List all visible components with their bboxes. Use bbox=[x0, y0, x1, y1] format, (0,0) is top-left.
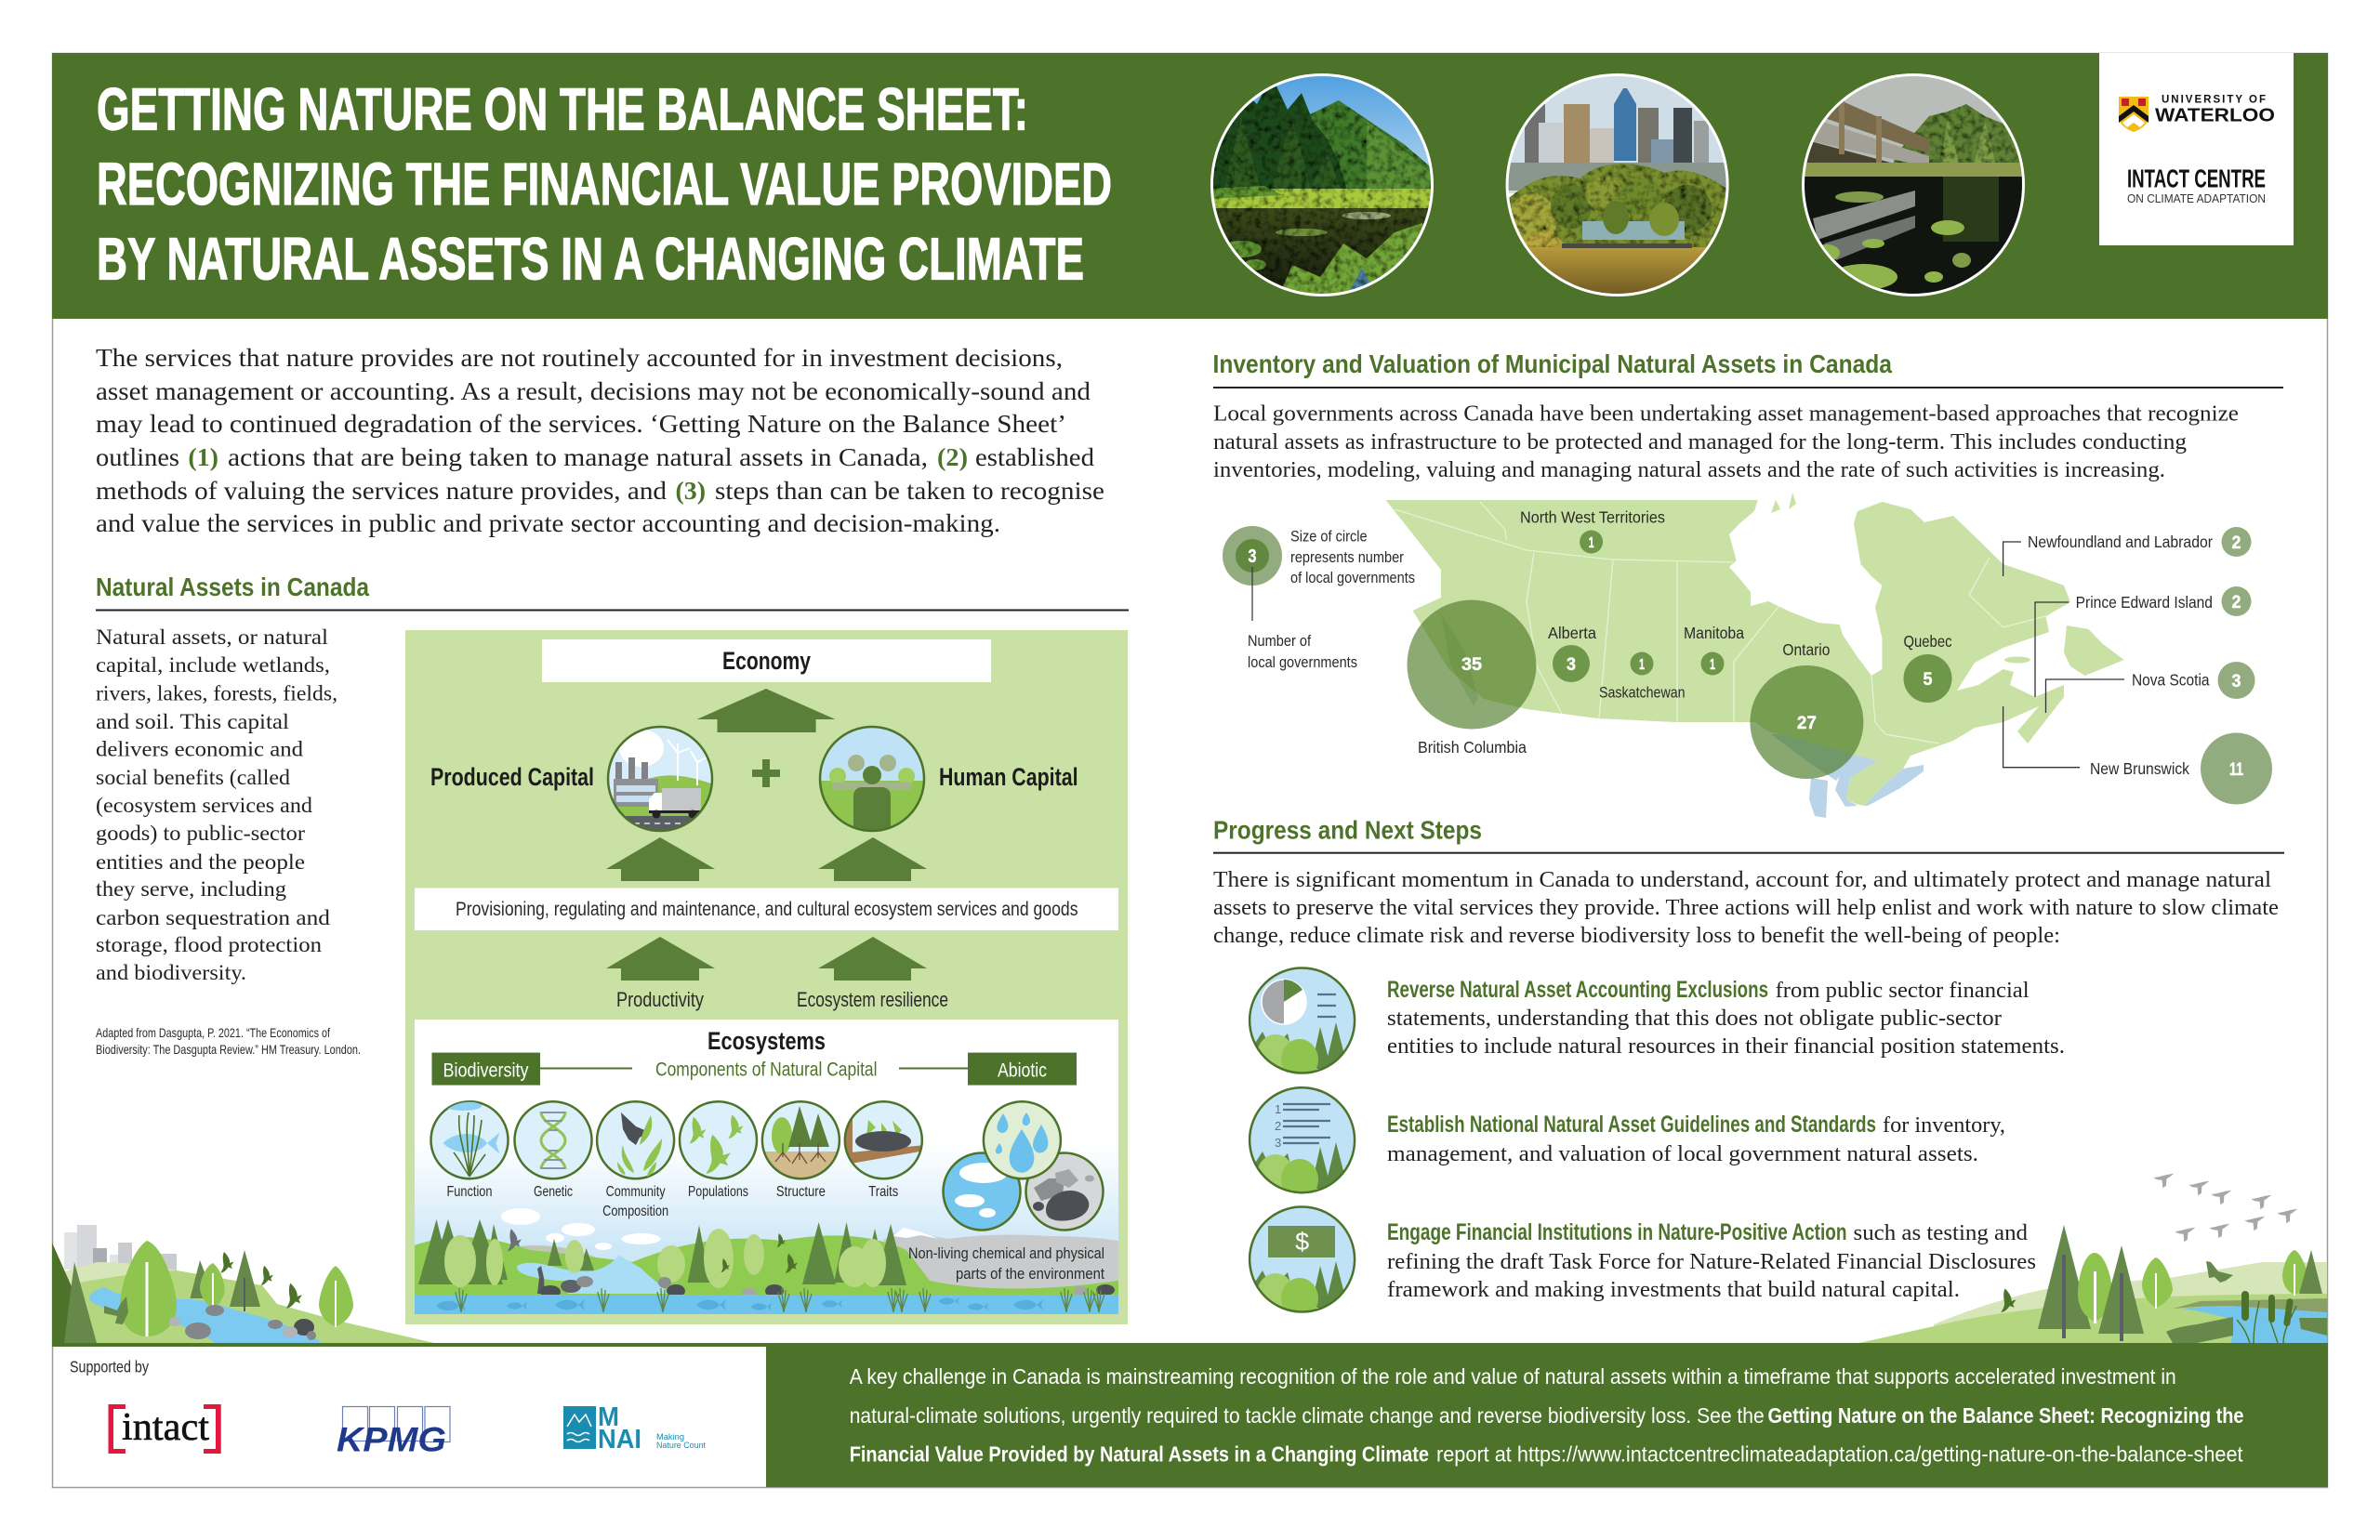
data: British Columbia: 35 bbox=[1461, 655, 1482, 675]
text block: natural assets definition: (ecosystem services and bbox=[96, 794, 312, 818]
title: RECOGNIZING THE FINANCIAL VALUE PROVIDED bbox=[97, 151, 1112, 217]
label: Populations: Populations bbox=[688, 1184, 748, 1200]
icon: dollar forest: $ bbox=[1295, 1228, 1309, 1256]
intro paragraph bbox=[96, 344, 1104, 537]
text block: natural assets definition bbox=[96, 625, 337, 985]
logo: University of Waterloo: WATERLOO bbox=[2155, 105, 2275, 125]
text: Engage Financial Institutions in Nature-Positive Action bbox=[1387, 1219, 1846, 1245]
data: Nova Scotia bbox=[2045, 662, 2255, 713]
text block: natural assets definition: entities and the people bbox=[96, 850, 305, 875]
data: Quebec: Quebec bbox=[1904, 632, 1952, 651]
data: Nova Scotia: Nova Scotia bbox=[2132, 671, 2210, 690]
legend: circle size: Number of bbox=[1248, 633, 1311, 650]
text block: progress paragraph: change, reduce climate risk and reverse biodiversity loss to benefit the well-being of people: bbox=[1213, 923, 2060, 948]
panel: key challenge: Getting Nature on the Balance Sheet: Recognizing the bbox=[1768, 1403, 2244, 1428]
subheading: components of natural capital: Components of Natural Capital bbox=[655, 1060, 878, 1080]
panel: supporters: Supported by bbox=[70, 1358, 149, 1376]
logo: intact bbox=[108, 1404, 221, 1454]
heading: Ecosystems: Ecosystems bbox=[707, 1027, 826, 1055]
intro paragraph: steps than can be taken to recognise bbox=[715, 477, 1104, 505]
logo: KPMG: KPMG bbox=[337, 1421, 446, 1459]
data: Newfoundland and Labrador: 2 bbox=[2231, 533, 2241, 553]
data: Prince Edward Island: 2 bbox=[2231, 593, 2241, 612]
text: statements, understanding that this does not obligate public-sector bbox=[1387, 1007, 2002, 1031]
box: Economy bbox=[542, 639, 991, 682]
intro paragraph: and value the services in public and private sector accounting and decision-making. bbox=[96, 509, 1000, 537]
text: such as testing and bbox=[1854, 1221, 2028, 1245]
intro paragraph: outlines bbox=[96, 443, 179, 471]
data: Ontario bbox=[1750, 640, 1863, 779]
icon: Function bbox=[431, 1101, 508, 1178]
action 3: engage financial institutions bbox=[1250, 1206, 2036, 1319]
footer divider band bbox=[52, 1343, 766, 1347]
data: Saskatchewan: 1 bbox=[1639, 657, 1645, 673]
panel: natural capital diagram bbox=[405, 630, 1128, 1324]
title bbox=[97, 76, 1112, 292]
icon: Genetic bbox=[515, 1101, 591, 1178]
text: Reverse Natural Asset Accounting Exclusions bbox=[1387, 977, 1768, 1003]
logo: Intact Centre: INTACT CENTRE bbox=[2127, 165, 2266, 193]
arrow: to human capital bbox=[818, 837, 927, 881]
text: Establish National Natural Asset Guidelines and Standards bbox=[1387, 1112, 1876, 1138]
data: Newfoundland and Labrador: Newfoundland and Labrador bbox=[2028, 533, 2213, 551]
icon: plus bbox=[752, 759, 780, 787]
data: New Brunswick: 11 bbox=[2229, 760, 2243, 780]
text block: inventory paragraph: Local governments across Canada have been undertaking asset management-based approaches that recognize bbox=[1213, 401, 2239, 427]
text: for inventory, bbox=[1883, 1113, 2005, 1138]
text block: natural assets definition: storage, flood protection bbox=[96, 933, 322, 957]
caption: non-living parts bbox=[908, 1244, 1104, 1283]
data: Saskatchewan: Saskatchewan bbox=[1599, 685, 1686, 702]
intro paragraph: (2) bbox=[937, 443, 968, 471]
tag: Abiotic bbox=[968, 1053, 1077, 1086]
logo: MNAI: Making bbox=[656, 1432, 684, 1441]
arrow: productivity bbox=[606, 937, 715, 981]
action 1: reverse exclusions bbox=[1250, 967, 2065, 1080]
photo: city skyline and park bbox=[1506, 72, 1729, 299]
text block: natural assets definition: capital, include wetlands, bbox=[96, 653, 330, 678]
label: Community Composition: Composition bbox=[602, 1204, 668, 1219]
logo: University of Waterloo bbox=[2119, 95, 2275, 132]
illustration: landscape bottom left bbox=[52, 1225, 434, 1343]
intro paragraph: (3) bbox=[675, 477, 706, 505]
label: Structure: Structure bbox=[776, 1184, 826, 1200]
text block: natural assets definition: delivers economic and bbox=[96, 738, 303, 762]
text block: natural assets definition: and biodiversity. bbox=[96, 961, 246, 985]
data: Alberta: Alberta bbox=[1548, 624, 1596, 642]
text block: inventory paragraph: natural assets as infrastructure to be protected and managed for the long-term. This includes conducting bbox=[1213, 429, 2187, 454]
data: British Columbia: British Columbia bbox=[1418, 738, 1527, 757]
photo: forest wetland bbox=[1209, 72, 1436, 298]
data: Quebec bbox=[1904, 632, 1952, 703]
icon: produced capital bbox=[607, 726, 716, 836]
box: ecosystem services: Provisioning, regulating and maintenance, and cultural ecosystem services and goods bbox=[456, 899, 1078, 920]
tag: Biodiversity bbox=[431, 1053, 540, 1086]
label: Productivity: Productivity bbox=[616, 988, 704, 1011]
text block: natural assets definition: social benefits (called bbox=[96, 766, 290, 790]
text block: natural assets definition: carbon sequestration and bbox=[96, 906, 330, 930]
logo: MNAI: M bbox=[598, 1402, 619, 1432]
header banner bbox=[52, 53, 2328, 319]
text bbox=[1387, 977, 2065, 1059]
panel: supporters bbox=[70, 1358, 706, 1459]
intro paragraph: (1) bbox=[188, 443, 218, 471]
intro paragraph: actions that are being taken to manage natural assets in Canada, bbox=[228, 443, 928, 471]
text block: progress paragraph bbox=[1213, 867, 2279, 948]
text: from public sector financial bbox=[1776, 979, 2030, 1003]
icon: numbered list forest: 1 bbox=[1275, 1102, 1281, 1116]
icon: numbered list forest: 2 bbox=[1275, 1119, 1281, 1133]
data: Quebec: 5 bbox=[1923, 670, 1933, 690]
text: entities to include natural resources in their financial position statements. bbox=[1387, 1034, 2065, 1059]
arrow: to produced capital bbox=[606, 837, 715, 881]
data: Manitoba bbox=[1684, 624, 1744, 675]
data: Newfoundland and Labrador bbox=[2003, 527, 2252, 576]
logo: intact: intact bbox=[122, 1406, 209, 1449]
illustration: landscape bottom right bbox=[1859, 1174, 2327, 1343]
panel: key challenge: A key challenge in Canada is mainstreaming recognition of the role and value of natural assets within a timeframe that supports accelerated investment in bbox=[850, 1364, 2176, 1389]
data: Ontario: Ontario bbox=[1782, 640, 1830, 659]
data: North West Territories bbox=[1520, 508, 1665, 554]
legend: circle size: Size of circle bbox=[1290, 529, 1368, 546]
label: Function: Function bbox=[446, 1184, 493, 1200]
label: Community Composition: Community bbox=[606, 1184, 666, 1200]
source note: Biodiversity: The Dasgupta Review.” HM Treasury. London. bbox=[96, 1042, 361, 1057]
logo: Intact Centre bbox=[2127, 165, 2266, 205]
label: Traits: Traits bbox=[868, 1184, 898, 1200]
label: Community Composition bbox=[602, 1184, 668, 1219]
map: Canada local governments bbox=[1223, 493, 2272, 818]
icon: numbered list forest: 3 bbox=[1275, 1136, 1281, 1150]
text block: natural assets definition: rivers, lakes, forests, fields, bbox=[96, 682, 337, 706]
source note bbox=[96, 1025, 361, 1057]
tag: Biodiversity: Biodiversity bbox=[443, 1060, 529, 1082]
heading: Natural Assets in Canada: Natural Assets in Canada bbox=[96, 573, 369, 601]
heading: Progress and Next Steps: Progress and Next Steps bbox=[1213, 816, 1482, 845]
panel: key challenge: natural-climate solutions, urgently required to tackle climate change and reverse biodiversity loss. See the bbox=[850, 1403, 1765, 1428]
icon: Structure bbox=[762, 1101, 840, 1181]
data: Manitoba: 1 bbox=[1710, 657, 1715, 673]
intro paragraph: The services that nature provides are not routinely accounted for in investment decisions, bbox=[96, 344, 1063, 372]
data: New Brunswick bbox=[2003, 706, 2272, 805]
caption: non-living parts: parts of the environment bbox=[956, 1265, 1104, 1283]
text block: inventory paragraph: inventories, modeling, valuing and managing natural assets and the rate of such activities is increasing. bbox=[1213, 457, 2165, 482]
intro paragraph: established bbox=[975, 443, 1095, 471]
data: Saskatchewan bbox=[1599, 652, 1686, 702]
title: BY NATURAL ASSETS IN A CHANGING CLIMATE bbox=[97, 225, 1084, 292]
panel: ecosystems bbox=[415, 1020, 1118, 1314]
text bbox=[1387, 1219, 2036, 1302]
box: Economy: Economy bbox=[722, 647, 811, 675]
icon: human capital bbox=[818, 726, 926, 843]
data: Alberta bbox=[1548, 624, 1596, 682]
data: North West Territories: 1 bbox=[1589, 535, 1594, 551]
tag: Abiotic: Abiotic bbox=[998, 1060, 1047, 1082]
heading: inventory and valuation: Inventory and Valuation of Municipal Natural Assets in Canada bbox=[1212, 349, 1892, 378]
logo: MNAI bbox=[563, 1402, 706, 1454]
text: framework and making investments that build natural capital. bbox=[1387, 1278, 1960, 1302]
icon: Community Composition bbox=[597, 1101, 674, 1178]
illustration: ecosystem landscape bbox=[415, 1208, 1118, 1314]
title: GETTING NATURE ON THE BALANCE SHEET: bbox=[97, 76, 1028, 143]
caption: non-living parts: Non-living chemical and physical bbox=[908, 1244, 1104, 1262]
intro paragraph: asset management or accounting. As a result, decisions may not be economically-sound and bbox=[96, 377, 1091, 405]
panel: key challenge: report at https://www.intactcentreclimateadaptation.ca/getting-nature-on-the-balance-sheet bbox=[1436, 1442, 2243, 1467]
text: refining the draft Task Force for Nature-Related Financial Disclosures bbox=[1387, 1250, 2036, 1274]
icon: Traits bbox=[844, 1101, 925, 1180]
icon: abiotic trio bbox=[943, 1101, 1103, 1231]
logo: KPMG bbox=[337, 1407, 450, 1459]
icon: water bbox=[984, 1101, 1061, 1178]
label: Genetic: Genetic bbox=[534, 1184, 573, 1200]
legend: circle size: local governments bbox=[1248, 654, 1357, 671]
map base bbox=[1385, 493, 2124, 818]
legend: circle size bbox=[1223, 526, 1415, 671]
data: Alberta: 3 bbox=[1567, 655, 1576, 675]
label: Ecosystem resilience: Ecosystem resilience bbox=[797, 988, 948, 1011]
text bbox=[1387, 1112, 2005, 1166]
text block: natural assets definition: goods) to public-sector bbox=[96, 822, 305, 846]
text block: progress paragraph: assets to preserve the vital services they provide. Three actions will help enlist and work with nature to slow climate bbox=[1213, 895, 2279, 920]
legend: circle size: of local governments bbox=[1290, 570, 1415, 586]
label: Produced Capital: Produced Capital bbox=[430, 763, 594, 791]
box: ecosystem services bbox=[415, 888, 1118, 930]
logo: Intact Centre: ON CLIMATE ADAPTATION bbox=[2127, 192, 2266, 205]
text block: natural assets definition: Natural assets, or natural bbox=[96, 625, 328, 650]
intro paragraph: methods of valuing the services nature provides, and bbox=[96, 477, 668, 505]
data: Nova Scotia: 3 bbox=[2231, 672, 2241, 691]
icon: dollar forest bbox=[1250, 1206, 1357, 1319]
data: Prince Edward Island: Prince Edward Island bbox=[2076, 593, 2213, 612]
icon: air bbox=[943, 1152, 1021, 1231]
text block: progress paragraph: There is significant momentum in Canada to understand, account for, and ultimately protect and manage natural bbox=[1213, 867, 2271, 892]
icon: Populations bbox=[680, 1101, 757, 1178]
icon: pie chart forest bbox=[1250, 967, 1357, 1080]
photo: boardwalk over wetland bbox=[1799, 72, 2028, 297]
panel: key challenge: Financial Value Provided by Natural Assets in a Changing Climate bbox=[850, 1442, 1429, 1467]
data: New Brunswick: New Brunswick bbox=[2090, 759, 2189, 778]
icon: numbered list forest bbox=[1250, 1087, 1357, 1200]
action 2: establish guidelines bbox=[1250, 1087, 2005, 1200]
arrow: to economy bbox=[697, 689, 835, 732]
arrow: ecosystem resilience bbox=[818, 937, 927, 981]
logo: MNAI: NAI bbox=[598, 1425, 641, 1454]
panel: key challenge bbox=[766, 1343, 2328, 1487]
data: Ontario: 27 bbox=[1797, 714, 1817, 733]
legend: circle size: 3 bbox=[1248, 546, 1257, 567]
label: Human Capital: Human Capital bbox=[939, 763, 1078, 791]
text block: natural assets definition: they serve, including bbox=[96, 877, 286, 902]
data: British Columbia bbox=[1408, 600, 1536, 757]
text block: inventory paragraph bbox=[1213, 401, 2239, 482]
text: management, and valuation of local government natural assets. bbox=[1387, 1142, 1978, 1166]
intro paragraph: may lead to continued degradation of the services. ‘Getting Nature on the Balance Sheet’ bbox=[96, 410, 1066, 438]
data: Prince Edward Island bbox=[2035, 586, 2252, 697]
data: North West Territories: North West Territories bbox=[1520, 508, 1665, 527]
legend: circle size: represents number bbox=[1290, 549, 1404, 566]
text block: natural assets definition: and soil. This capital bbox=[96, 710, 289, 734]
icon: rocks bbox=[1026, 1152, 1103, 1231]
source note: Adapted from Dasgupta, P. 2021. “The Economics of bbox=[96, 1025, 330, 1040]
logo: MNAI: Nature Count bbox=[656, 1441, 706, 1450]
logo: University of Waterloo: UNIVERSITY OF bbox=[2162, 95, 2268, 106]
logos panel bbox=[2099, 53, 2294, 245]
data: Manitoba: Manitoba bbox=[1684, 624, 1744, 642]
